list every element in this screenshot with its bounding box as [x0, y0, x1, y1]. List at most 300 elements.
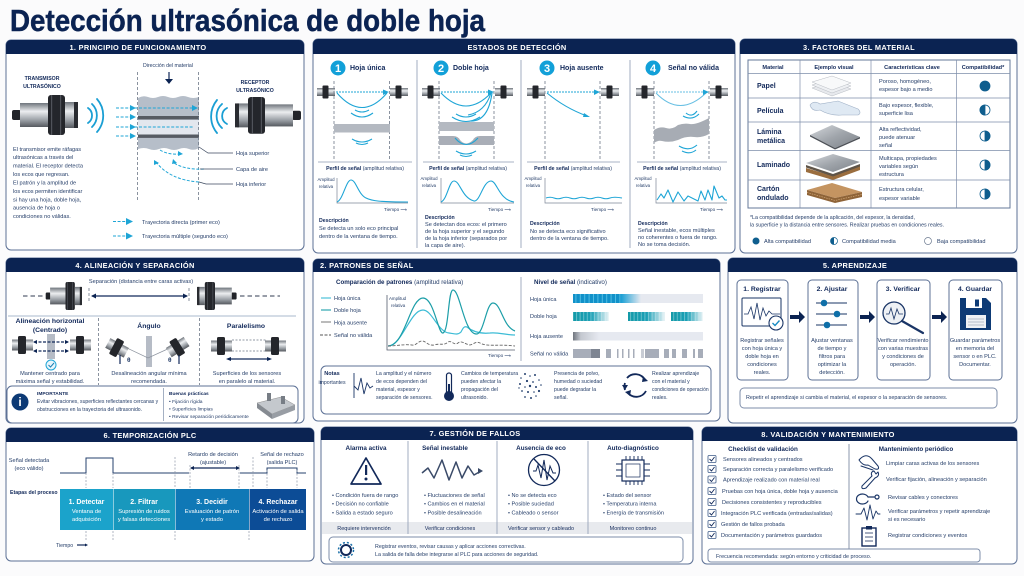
fault: ausencia de eco: • Posible suciedad — [508, 502, 554, 508]
note: dust: puede degradar la — [554, 387, 596, 393]
time arrow — [56, 543, 88, 549]
fault: ausencia de eco: • No se detecta eco — [508, 493, 557, 499]
icon: clipboard — [862, 526, 876, 546]
ultrasonic paths — [116, 108, 204, 182]
state 4: señal no válida: relativa — [636, 183, 651, 188]
state 4: señal no válida: Amplitud — [634, 176, 652, 181]
receiver label — [236, 80, 274, 94]
icon: wrench — [862, 471, 879, 489]
state 2: doble hoja: la capa de aire). — [425, 243, 466, 249]
periodic maintenance: Limpiar caras activas de los sensores — [886, 461, 979, 467]
checklist: Sensores alineados y centrados — [723, 457, 803, 463]
icon: cable — [857, 494, 879, 504]
table header: Compatibilidad* — [962, 65, 1005, 71]
state 1: hoja única: Tiempo ⟶ — [384, 207, 407, 212]
key characteristics: puede atenuar — [879, 135, 915, 141]
periodic maintenance: Verificar parámetros y repetir aprendizaje — [888, 509, 990, 515]
material names: Laminado — [757, 162, 790, 169]
step 3: verificar: y condiciones de — [882, 354, 924, 360]
parallelism: Paralelismo — [227, 323, 265, 330]
strip labels — [337, 526, 656, 532]
stage 3: decidir: y estado — [201, 517, 223, 523]
best practices: Buenas prácticas — [169, 391, 209, 397]
heading: 6. TEMPORIZACIÓN PLC — [103, 431, 197, 440]
note: learning — [652, 371, 709, 401]
fault: alarma activa: • Decisión no confiable — [332, 502, 389, 508]
timing labels: (eco válido) — [15, 466, 44, 472]
note: temperature — [461, 371, 518, 401]
key characteristics: estructura — [879, 172, 905, 178]
compatibility legend: Alta compatibilidad — [764, 239, 811, 245]
stage 1: detectar — [60, 489, 113, 530]
note: temperature: pueden afectar la — [461, 379, 501, 385]
note: amplitude: separación de sensores. — [376, 395, 433, 401]
arrow: step 2 to 3 — [860, 311, 875, 323]
note: temperature: Cambios de temperatura — [461, 371, 518, 377]
heading: 4. ALINEACIÓN Y SEPARACIÓN — [75, 261, 195, 270]
fault: ausencia de eco: • Cableado o sensor — [508, 510, 559, 516]
best practices — [169, 391, 249, 420]
signal level bars: Hoja ausente — [530, 334, 563, 340]
angle: θ — [127, 357, 131, 364]
horizontal alignment: (Centrado) — [33, 327, 67, 334]
state 4: señal no válida: Tiempo ⟶ — [700, 207, 723, 212]
arrow: material direction — [165, 72, 173, 84]
step 1: registrar: reales. — [754, 370, 771, 376]
description: los ecos permiten identificar — [13, 189, 82, 195]
table header: Características clave — [884, 65, 940, 71]
step 4: guardar — [949, 280, 1002, 380]
stage 2: filtrar: y falsas detecciones — [118, 517, 170, 523]
stage 4: rechazar: Activación de salida — [252, 509, 304, 515]
state 2: doble hoja: relativa — [422, 183, 437, 188]
step 2: ajustar: 2. Ajustar — [817, 286, 848, 293]
best practices: • Superficies limpias — [169, 406, 213, 412]
fault: señal inestable — [422, 445, 485, 516]
transmitter label: TRANSMISOR — [25, 76, 60, 82]
state 1: hoja única: Hoja única — [350, 65, 386, 72]
state 3: hoja ausente: Perfil de señal (amplitud relativa) — [534, 166, 612, 172]
frequency note: Frecuencia recomendada: según entorno y criticidad de proceso. — [716, 554, 871, 560]
heading: 7. GESTIÓN DE FALLOS — [429, 429, 521, 438]
panel: 3. factores del material — [740, 39, 1017, 253]
timing labels: (salida PLC) — [267, 460, 298, 466]
material names — [757, 83, 790, 202]
checklist: Gestión de fallos probada — [721, 522, 786, 528]
notes box — [318, 366, 711, 414]
description: El transmisor emite ráfagas — [13, 147, 81, 153]
state 4: señal no válida: Perfil de señal (amplitud relativa) — [643, 166, 721, 172]
heading: 1. PRINCIPIO DE FUNCIONAMIENTO — [70, 43, 206, 52]
step 4: guardar: Guardar parámetros — [950, 338, 1000, 344]
state 4: señal no válida: Señal no válida — [668, 65, 719, 72]
transmitter label — [23, 76, 61, 90]
fault: señal inestable: • Fluctuaciones de señal — [424, 493, 485, 499]
stage 4: rechazar: de rechazo — [264, 517, 292, 523]
footnote: *La compatibilidad depende de la aplicación, del espesor, la densidad, — [750, 215, 915, 221]
checklist — [708, 446, 839, 539]
key characteristics: Poroso, homogéneo, — [879, 79, 931, 85]
material names: Papel — [757, 83, 776, 90]
state 1: hoja única: Descripción — [319, 218, 349, 224]
icon: cycle — [622, 374, 648, 397]
pattern legend — [320, 296, 373, 339]
checklist: Documentación y parámetros guardados — [721, 533, 822, 539]
note: temperature: propagación del — [461, 387, 498, 393]
step 2: ajustar: detección. — [819, 370, 845, 376]
legend: trajectories — [113, 218, 228, 240]
arrow: step 1 to 2 — [790, 311, 805, 323]
step 4: guardar: Documentar. — [959, 362, 991, 368]
description: ausencia de hoja o — [13, 206, 60, 212]
stage 1: detectar: Ventana de — [72, 509, 101, 515]
fault: señal inestable: • Posible desalineación — [424, 510, 482, 516]
step 3: verificar: operación. — [890, 362, 917, 368]
key characteristics: variables según — [879, 164, 918, 170]
description — [13, 147, 84, 220]
frequency note — [708, 549, 980, 562]
stage 1: detectar: adquisición — [72, 517, 101, 523]
footnote — [750, 215, 944, 228]
fault: alarma activa: • Condición fuera de rango — [332, 493, 398, 499]
step 4: guardar: 4. Guardar — [958, 286, 992, 293]
fault: auto-diagnóstico: Auto-diagnóstico — [607, 445, 659, 452]
material names: Lámina — [757, 129, 782, 136]
stage 2: filtrar: Supresión de ruidos — [118, 509, 170, 515]
checklist: Decisiones consistentes y reproducibles — [722, 500, 822, 506]
key characteristics: Alta reflectividad, — [879, 127, 922, 133]
state 1: hoja única: dentro de la ventana de tiempo. — [319, 234, 398, 240]
notes label — [318, 371, 346, 386]
state 3: hoja ausente — [524, 60, 622, 242]
icon: cleaning hand — [859, 456, 879, 470]
key characteristics: Estructura celular, — [879, 187, 924, 193]
periodic maintenance: si es necesario — [888, 517, 925, 523]
labels: sheet layers — [199, 147, 269, 188]
horizontal alignment: máxima señal y estabilidad. — [16, 379, 85, 385]
state 1: hoja única: Amplitud — [317, 177, 335, 182]
step 1: registrar — [737, 280, 788, 380]
step 3: verificar: Verificar rendimiento — [878, 338, 928, 344]
fault: auto-diagnóstico: • Temperatura interna — [603, 502, 657, 508]
panel: 6. temporización plc — [6, 428, 314, 561]
table header: Material — [762, 65, 784, 71]
heading: 5. APRENDIZAJE — [823, 261, 887, 270]
state 4: señal no válida: no coherentes o fuera de rango. — [638, 235, 718, 241]
log note — [329, 537, 683, 562]
pattern legend: Señal no válida — [334, 333, 373, 339]
heading: 2. PATRONES DE SEÑAL — [320, 261, 414, 270]
periodic maintenance: Verificar fijación, alineación y separación — [886, 477, 987, 483]
fault: auto-diagnóstico: • Estado del sensor — [603, 493, 651, 499]
step 2: ajustar: de tiempo y — [818, 346, 847, 352]
material direction label: Dirección del material — [143, 63, 193, 69]
panel: 7. gestión de fallos — [321, 427, 693, 564]
state 2: doble hoja: 2 — [438, 63, 444, 75]
state 2: doble hoja: Descripción — [425, 215, 455, 221]
fault: auto-diagnóstico: • Energía de transmisión — [603, 510, 664, 516]
timing labels: Señal detectada — [9, 458, 50, 464]
state 4: señal no válida: Señal inestable, ecos múltiples — [638, 228, 715, 234]
note: amplitude — [376, 371, 433, 401]
material names: metálica — [757, 138, 785, 145]
horizontal alignment: Alineación horizontal — [16, 318, 84, 325]
timing labels: Señal de rechazo — [260, 452, 304, 458]
signal level bars: Señal no válida — [530, 352, 569, 358]
checklist: Integración PLC verificada (entradas/salidas) — [721, 511, 833, 517]
notes label: Notas — [324, 371, 340, 377]
horizontal alignment: Mantener centrado para — [20, 371, 81, 377]
legend: trajectories: Trayectoria directa (primer eco) — [142, 220, 220, 226]
repeat note: Repetir el aprendizaje si cambia el material, el espesor o la separación de sensores. — [746, 395, 947, 401]
title: Detección ultrasónica de doble hoja — [10, 3, 486, 38]
note: dust: humedad o suciedad — [554, 379, 602, 385]
fault: alarma activa — [332, 445, 398, 516]
line chart: patterns: relativa — [391, 303, 406, 308]
arrow: step 3 to 4 — [932, 311, 947, 323]
transmitter label: ULTRASÓNICO — [23, 82, 61, 90]
timing labels: (ajustable) — [200, 460, 226, 466]
periodic maintenance: Registrar condiciones y eventos — [888, 533, 967, 539]
panel: 8. validación y mantenimiento — [702, 427, 1017, 564]
periodic maintenance: Mantenimiento periódico — [879, 446, 953, 453]
state 2: doble hoja: de la hoja superior y el segundo — [425, 229, 504, 235]
notes label: importantes — [318, 380, 346, 386]
note: amplitude: La amplitud y el número — [376, 371, 431, 377]
note: dust: señal. — [554, 395, 568, 401]
key characteristics: espesor bajo a medio — [879, 87, 932, 93]
icon: received waves — [211, 100, 227, 133]
compatibility indicators — [980, 81, 990, 199]
key characteristics: Bajo espesor, flexible, — [879, 103, 934, 109]
state 4: señal no válida: 4 — [650, 63, 657, 75]
icon: info — [12, 394, 28, 410]
state 2: doble hoja: Perfil de señal (amplitud relativa) — [429, 166, 507, 172]
icon: transmitter sensor — [12, 95, 78, 135]
state 1: hoja única: Se detecta un solo eco principal — [319, 226, 398, 232]
receiver label: ULTRASÓNICO — [236, 86, 274, 94]
fault: alarma activa: • Salida a estado seguro — [332, 510, 393, 516]
periodic maintenance — [856, 446, 990, 546]
strip labels: Verificar condiciones — [425, 526, 475, 532]
fault: alarma activa: Alarma activa — [346, 445, 387, 452]
best practices: • Revisar separación periódicamente — [169, 414, 249, 420]
compatibility legend — [752, 238, 986, 245]
description: El patrón y la amplitud de — [13, 180, 76, 186]
material images — [806, 76, 862, 203]
etapas label: Etapas del proceso — [10, 490, 58, 496]
description: los ecos que regresan. — [13, 172, 70, 178]
description: si hay una hoja, doble hoja, — [13, 198, 82, 204]
description: ultrasónicas a través del — [13, 155, 73, 161]
state 1: hoja única: Perfil de señal (amplitud relativa) — [326, 166, 404, 172]
note: amplitude: material, espesor y — [376, 387, 420, 393]
timing labels — [9, 452, 304, 472]
panel: 4. alineación y separación — [6, 258, 304, 423]
stage 1: detectar: 1. Detectar — [69, 499, 105, 506]
log note: Registrar eventos, revisar causas y aplicar acciones correctivas. — [375, 544, 526, 550]
stage 4: rechazar — [250, 489, 306, 530]
angle: Desalineación angular mínima — [111, 371, 188, 377]
fault: señal inestable: • Cambios en el material — [424, 502, 485, 508]
checklist: Separación correcta y paralelismo verificado — [723, 467, 833, 473]
state 4: señal no válida: Descripción — [638, 221, 668, 227]
icon: info: i — [18, 395, 22, 409]
material names: Cartón — [757, 186, 780, 193]
strip labels: Monitoreo continuo — [610, 526, 656, 532]
icon: thermometer — [444, 373, 454, 401]
log note: La salida de falla debe integrarse al PLC para acciones de seguridad. — [375, 552, 538, 558]
compatibility legend: Compatibilidad media — [842, 239, 897, 245]
timing signal — [60, 457, 306, 488]
state 4: señal no válida: No se toma decisión. — [638, 242, 691, 248]
key characteristics: señal — [879, 143, 892, 149]
signal level bars: Doble hoja — [530, 314, 558, 320]
table header: Ejemplo visual — [814, 65, 854, 71]
important box — [7, 386, 298, 423]
angle: Ángulo — [137, 321, 161, 330]
key characteristics: Multicapa, propiedades — [879, 156, 937, 162]
checklist: Aprendizaje realizado con material real — [723, 478, 820, 484]
key characteristics — [879, 79, 937, 202]
line chart: patterns: Amplitud — [389, 296, 407, 301]
panel: 5. aprendizaje — [728, 258, 1017, 423]
state 2: doble hoja: Tiempo ⟶ — [488, 207, 511, 212]
state 3: hoja ausente: Hoja ausente — [560, 65, 604, 72]
angle: recomendada. — [131, 379, 167, 385]
note: dust: Presencia de polvo, — [554, 371, 600, 377]
state 3: hoja ausente: relativa — [526, 183, 541, 188]
labels: sheet layers: Hoja inferior — [236, 182, 266, 188]
state 1: hoja única: 1 — [335, 63, 341, 75]
separation diagram — [23, 279, 280, 310]
state 3: hoja ausente: dentro de la ventana de tiempo. — [530, 236, 609, 242]
state 2: doble hoja: Se detectan dos ecos: el primero — [425, 222, 507, 228]
state 3: hoja ausente: No se detecta eco significativo — [530, 229, 606, 235]
arrowheads — [130, 105, 198, 165]
best practices: • Fijación rígida — [169, 399, 203, 405]
heading: ESTADOS DE DETECCIÓN — [467, 43, 567, 52]
material names: ondulado — [757, 195, 788, 202]
table header — [762, 65, 1005, 71]
step 1: registrar: doble hoja en — [745, 354, 779, 360]
heading: 3. FACTORES DEL MATERIAL — [803, 43, 915, 52]
icon: receiver sensor — [235, 97, 301, 134]
stage 3: decidir — [176, 489, 249, 530]
horizontal alignment — [12, 318, 91, 385]
note: learning: con el material y — [652, 379, 690, 385]
fault: ausencia de eco — [508, 445, 566, 516]
key characteristics: espesor variable — [879, 196, 920, 202]
parallelism: en paralelo al material. — [219, 379, 276, 385]
step 1: registrar: condiciones — [747, 362, 777, 368]
step 3: verificar: 3. Verificar — [886, 286, 921, 293]
line chart: patterns: Tiempo ⟶ — [488, 353, 511, 358]
comparison title: Comparación de patrones (amplitud relativa) — [336, 279, 463, 286]
fault: auto-diagnóstico — [603, 445, 664, 516]
state 4: señal no válida — [634, 60, 728, 248]
pattern legend: Hoja ausente — [334, 320, 367, 326]
step 4: guardar: sensor o en PLC. — [953, 354, 997, 360]
stage 2: filtrar — [114, 489, 175, 530]
icon: gear — [338, 542, 354, 558]
angle — [104, 321, 191, 385]
state 1: hoja única — [317, 60, 412, 240]
step 2: ajustar: Ajustar ventanas — [811, 338, 853, 344]
note: learning: condiciones de operación — [652, 387, 709, 393]
icon: emitted waves — [88, 99, 103, 132]
stage 4: rechazar: 4. Rechazar — [259, 499, 298, 506]
important text — [37, 391, 159, 413]
periodic maintenance: Revisar cables y conectores — [888, 495, 958, 501]
important text: IMPORTANTE — [37, 391, 69, 397]
important text: obstrucciones en la trayectoria del ultrasonido. — [37, 407, 142, 413]
state 1: hoja única: relativa — [319, 184, 334, 189]
footnote: la superficie y la distancia entre sensores. Realizar pruebas en condiciones reales. — [750, 222, 944, 228]
description: condiciones no válidas. — [13, 214, 71, 220]
note: temperature: ultrasonido. — [461, 395, 488, 401]
description: material. El receptor detecta — [13, 164, 84, 170]
material names: Película — [757, 108, 784, 115]
icon: mounting bracket — [257, 393, 295, 419]
receiver label: RECEPTOR — [241, 80, 270, 86]
icon: signal — [856, 505, 880, 520]
labels: sheet layers: Capa de aire — [236, 167, 268, 173]
pattern legend: Hoja única — [334, 296, 361, 302]
step 3: verificar — [877, 280, 930, 380]
step 1: registrar: con hoja única y — [742, 346, 782, 352]
step 4: guardar: en memoria del — [956, 346, 994, 352]
angle: θ — [168, 357, 172, 364]
fault: ausencia de eco: Ausencia de eco — [516, 445, 566, 452]
strip labels: Requiere intervención — [337, 526, 391, 532]
signal level bars: Hoja única — [530, 297, 557, 303]
separation diagram: Separación (distancia entre caras activas) — [89, 279, 193, 285]
step 1: registrar: 1. Registrar — [743, 286, 781, 293]
state 3: hoja ausente: Tiempo ⟶ — [591, 207, 614, 212]
material table — [748, 60, 1010, 208]
icon: pulse — [354, 373, 373, 398]
note: dust — [554, 371, 602, 401]
state 3: hoja ausente: 3 — [544, 63, 550, 75]
signal level bars — [530, 294, 703, 358]
state 2: doble hoja: Amplitud — [420, 176, 438, 181]
legend: trajectories: Trayectoria múltiple (segundo eco) — [142, 234, 228, 240]
state 3: hoja ausente: Amplitud — [524, 176, 542, 181]
parallelism: Superficies de los sensores — [213, 371, 281, 377]
heading: 8. VALIDACIÓN Y MANTENIMIENTO — [761, 430, 895, 439]
important text: Evitar vibraciones, superficies reflectantes cercanas y — [37, 399, 159, 405]
key characteristics: superficie lisa — [879, 111, 914, 117]
state 2: doble hoja: Doble hoja — [453, 65, 489, 72]
stage 3: decidir: Evaluación de patrón — [185, 509, 239, 515]
step 2: ajustar — [808, 280, 858, 380]
time arrow: Tiempo — [56, 543, 73, 549]
state 2: doble hoja — [420, 60, 514, 249]
panel: 1. principio de funcionamiento — [6, 40, 304, 250]
step 3: verificar: con varias muestras — [878, 346, 928, 352]
timing labels: Retardo de decisión — [188, 452, 238, 458]
step 2: ajustar: optimizar la — [818, 362, 847, 368]
labels: sheet layers: Hoja superior — [236, 151, 269, 157]
pattern legend: Doble hoja — [334, 308, 362, 314]
panel: 2. patrones de señal — [313, 259, 720, 421]
step 1: registrar: Registrar señales — [740, 338, 784, 344]
compatibility legend: Baja compatibilidad — [937, 239, 986, 245]
stage 2: filtrar: 2. Filtrar — [130, 499, 158, 506]
state 2: doble hoja: de la hoja inferior (separados por — [425, 236, 507, 242]
state 3: hoja ausente: Descripción — [530, 221, 560, 227]
